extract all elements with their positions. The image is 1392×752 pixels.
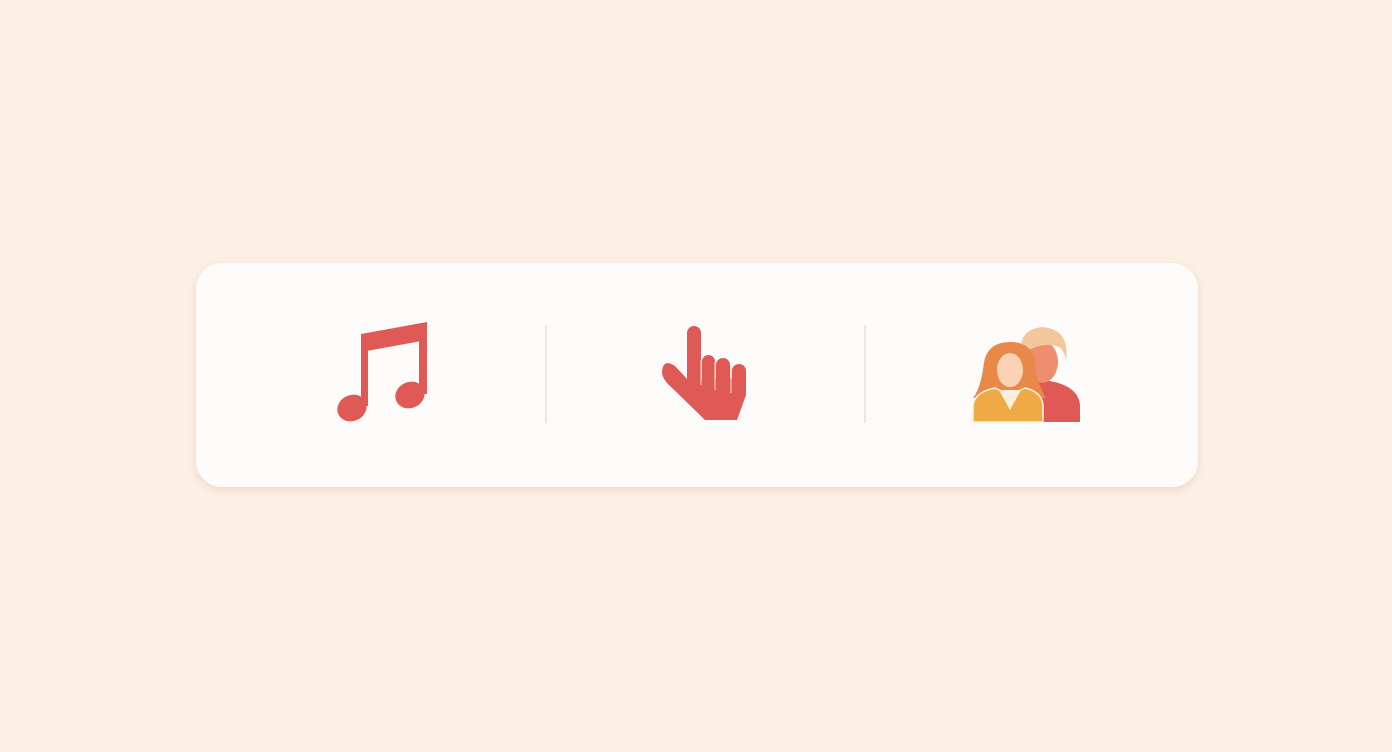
panel: icon card xyxy=(196,263,1198,487)
